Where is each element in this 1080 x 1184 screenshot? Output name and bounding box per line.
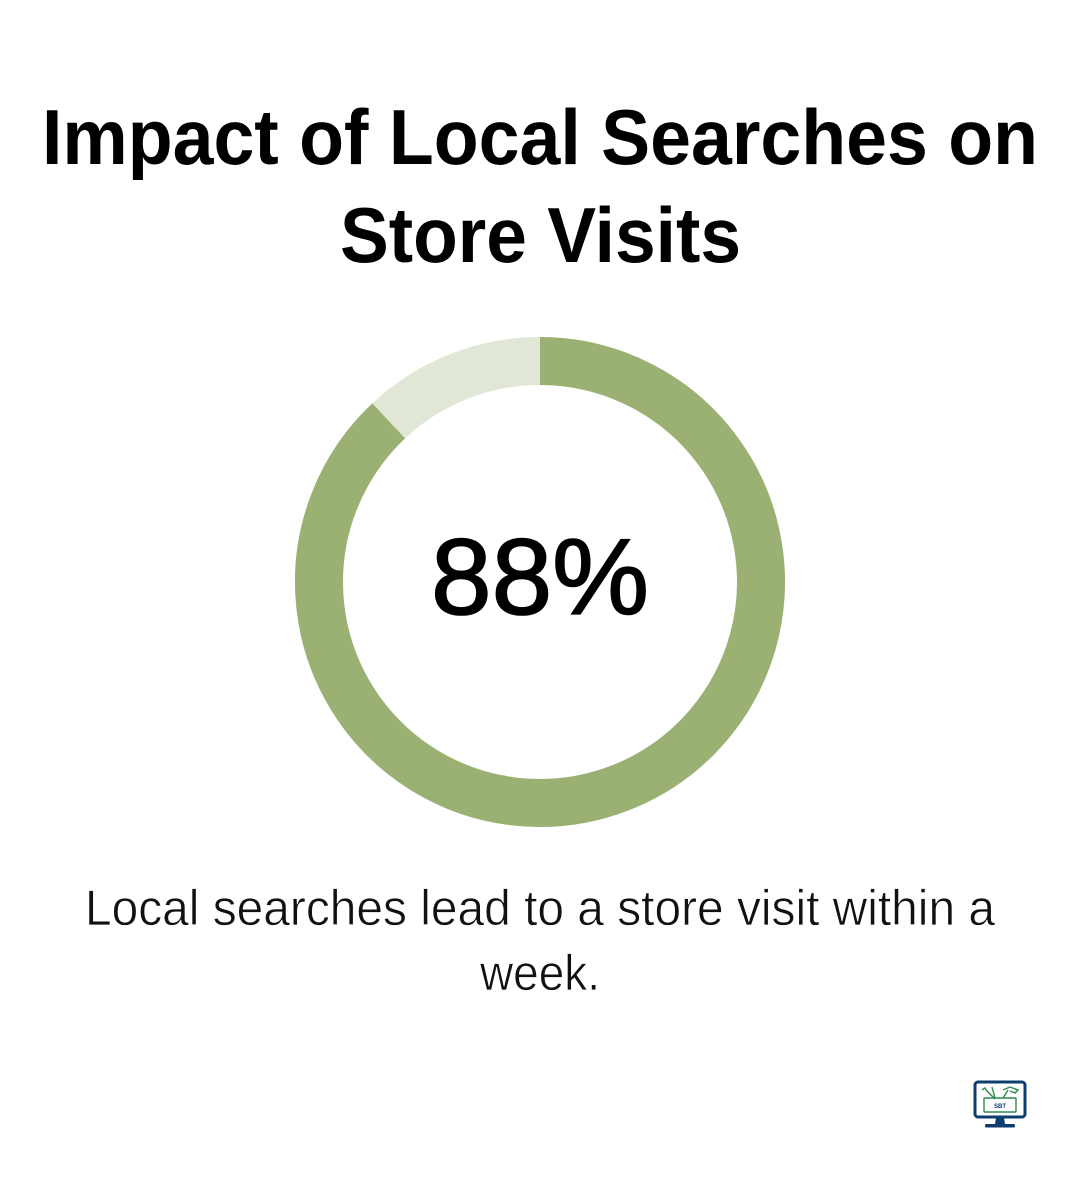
caption: week.: [479, 945, 600, 1001]
caption: Local searches lead to a store visit within a: [85, 880, 995, 936]
icon: SBT monitor logo: [975, 1082, 1025, 1128]
donut chart: 88%: [319, 361, 761, 803]
icon: SBT monitor logo: SBT: [994, 1104, 1006, 1110]
title: Store Visits: [340, 191, 741, 279]
donut value: 88%: [431, 516, 649, 637]
title: [42, 93, 1038, 279]
title: Impact of Local Searches on: [42, 93, 1038, 181]
caption: [85, 880, 995, 1001]
